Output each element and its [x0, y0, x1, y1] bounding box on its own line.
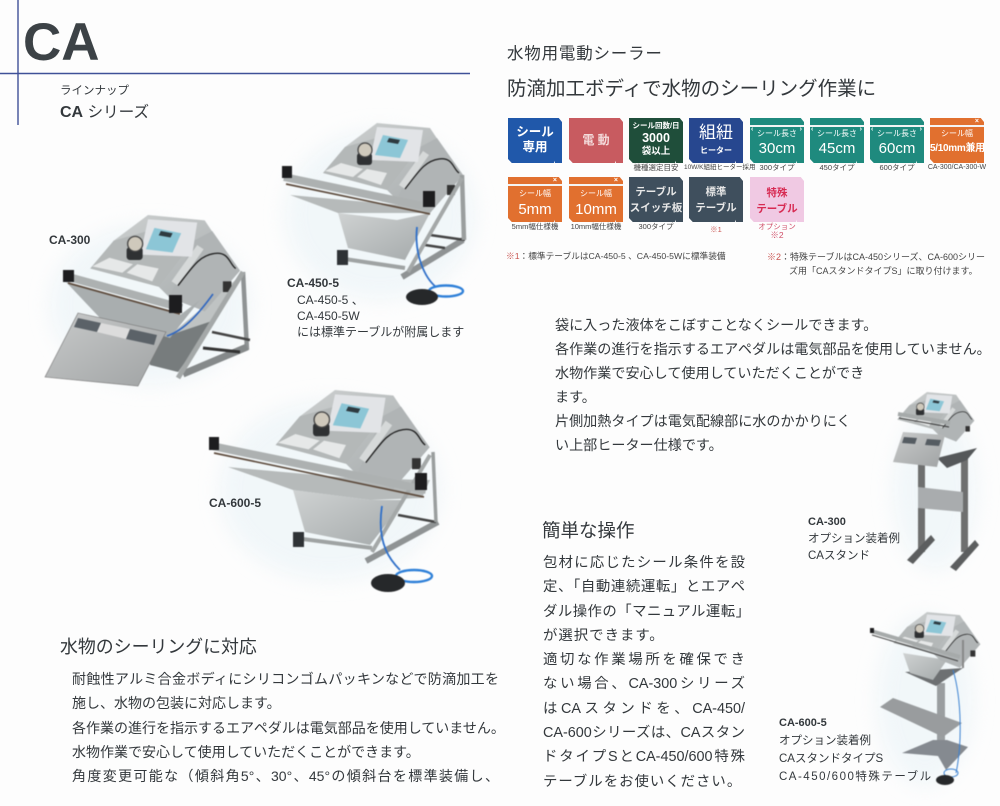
- body text: right upper: [555, 317, 991, 453]
- icon: seal length 30cm: シール長さ: [757, 129, 797, 138]
- captions: first row: 600タイプ: [879, 163, 914, 172]
- captions: first row: 機種選定目安: [634, 163, 678, 172]
- icon: seal length 45cm: シール長さ: [817, 129, 857, 138]
- icon: seal width 10mm: 10mm: [575, 201, 617, 218]
- captions: second row: [512, 222, 796, 240]
- icon: seal length 30cm: 30cm: [759, 140, 795, 157]
- body text: right upper: 水物作業で安心して使用していただくことができ: [555, 365, 864, 381]
- icon: seal length 60cm: シール長さ: [877, 129, 917, 138]
- series name: CA シリーズ: [60, 104, 149, 121]
- icon: braided heater: ヒーター: [700, 146, 732, 155]
- captions: second row: 5mm幅仕様機: [512, 222, 558, 231]
- icon: seal length 30cm: ›: [800, 126, 802, 133]
- body text: right upper: い上部ヒーター仕様です。: [555, 437, 723, 453]
- machine: CA-600-5 on stand: [870, 612, 980, 785]
- note: CA-450-5: CA-450-5W: [297, 309, 360, 323]
- icon: seal length 45cm: 45cm: [819, 140, 855, 157]
- main heading: 防滴加工ボディで水物のシーリング作業に: [507, 78, 876, 100]
- heading: easy operation: 簡単な操作: [542, 520, 635, 541]
- header rule lines: [0, 0, 470, 125]
- icon: seal width 5mm: [508, 177, 562, 222]
- icon: seal length 45cm: [810, 118, 864, 163]
- body text: easy operation: CA-600シリーズは、CAスタン: [543, 725, 745, 741]
- icon: electric: [569, 118, 623, 163]
- machine: CA-600-5: [209, 390, 440, 592]
- icon: seal width 5/10mm: シール幅: [941, 129, 973, 138]
- icon: seal width 10mm: シール幅: [580, 189, 612, 198]
- icon: seal width 5mm: シール幅: [519, 189, 551, 198]
- label: CA-600-5 stand option: オプション装着例: [779, 735, 871, 747]
- captions: first row: 300タイプ: [759, 163, 794, 172]
- icon: seal only: [508, 118, 562, 163]
- label: CA-600-5 stand option: CA-600-5: [779, 717, 827, 729]
- body text: water sealing: 水物作業で安心して使用していただくことができます。: [72, 744, 420, 760]
- icon: seal length 60cm: ‹: [871, 126, 873, 133]
- body text: easy operation: ダル操作の「マニュアル運転」: [543, 604, 750, 620]
- body text: easy operation: テーブルをお使いください。: [543, 774, 742, 790]
- body text: right upper: 各作業の進行を指示するエアペダルは電気部品を使用していません。: [555, 341, 991, 357]
- captions: second row: オプション: [758, 222, 796, 231]
- body text: right upper: 袋に入った液体をこぼすことなくシールできます。: [555, 317, 877, 333]
- icon: special table: [750, 177, 804, 222]
- label: CA-300 stand option: [808, 516, 900, 562]
- machine: CA-450-5: [282, 123, 475, 305]
- icon: table switch plate: スイッチ板: [630, 202, 682, 214]
- label: CA-600-5: CA-600-5: [209, 496, 261, 510]
- body text: water sealing: 耐蝕性アルミ合金ボディにシリコンゴムパッキンなどで防滴加工を: [72, 671, 499, 687]
- icon: seal length 30cm: [750, 118, 804, 163]
- footnote 2: ズ用「CAスタンドタイプS」に取り付けます。: [789, 266, 978, 276]
- machine: CA-300: [45, 215, 250, 386]
- icon: seal length 30cm: ‹: [751, 126, 753, 133]
- captions: first row: 450タイプ: [819, 163, 854, 172]
- icon: seal length 60cm: 60cm: [879, 140, 915, 157]
- icon: special table: 特殊: [766, 187, 788, 199]
- captions: second row: 300タイプ: [638, 222, 674, 231]
- lineup label: ラインナップ: [60, 85, 129, 97]
- icon: seal width 5/10mm: ×: [975, 118, 979, 125]
- icon: seal width 5mm: 5mm: [518, 201, 552, 218]
- icon: 3000 bags: 袋以上: [642, 146, 670, 157]
- icon: braided heater: 組紐: [699, 123, 733, 142]
- footnote 1: ※1：標準テーブルはCA-450-5 、CA-450-5Wに標準装備: [506, 251, 726, 261]
- label: CA-600-5 stand option: CAスタンドタイプS: [779, 753, 883, 765]
- icon: seal width 10mm: [569, 177, 623, 222]
- label: CA-300 stand option: CAスタンド: [808, 550, 870, 562]
- body text: right upper: 片側加熱タイプは電気配線部に水のかかりにく: [555, 413, 851, 429]
- icon: seal only: 専用: [522, 140, 548, 154]
- product type heading: 水物用電動シーラー: [507, 45, 663, 63]
- body text: easy operation: ない場合、CA-300シリーズ: [543, 676, 745, 692]
- captions: first row: [634, 163, 986, 172]
- machine: CA-300 on stand: [893, 392, 979, 571]
- icon: 3000 bags: [629, 118, 683, 163]
- body text: easy operation: ドタイプSとCA-450/600特殊: [543, 749, 745, 765]
- label: CA-600-5 stand option: [779, 717, 933, 783]
- body text: right upper: ます。: [555, 389, 596, 405]
- body text: easy operation: 包材に応じたシール条件を設: [543, 555, 745, 571]
- icon: 3000 bags: 3000: [642, 131, 670, 145]
- body text: easy operation: [543, 554, 750, 790]
- label: CA-450-5: CA-450-5: [287, 276, 339, 290]
- icon: special table: テーブル: [756, 203, 798, 215]
- icon: 3000 bags: シール回数/日: [632, 121, 680, 130]
- captions: first row: CA-300/CA-300-W: [928, 164, 986, 171]
- body text: easy operation: 定、「自動連続運転」とエアペ: [543, 579, 745, 595]
- icon: table switch plate: [629, 177, 683, 222]
- body text: easy operation: が選択できます。: [543, 628, 665, 644]
- heading: water sealing: 水物のシーリングに対応: [60, 637, 257, 657]
- label: CA-300 stand option: オプション装着例: [808, 533, 900, 545]
- footnote 2: [767, 252, 985, 276]
- body text: water sealing: 各作業の進行を指示するエアペダルは電気部品を使用していません。: [72, 720, 505, 736]
- icon: standard table: テーブル: [695, 202, 737, 214]
- note: CA-450-5: には標準テーブルが附属します: [297, 325, 464, 339]
- icon: table switch plate: テーブル: [635, 186, 677, 198]
- icon: seal length 60cm: ›: [920, 126, 922, 133]
- captions: second row: 10mm幅仕様機: [571, 222, 621, 231]
- footnote 2: ※2：特殊テーブルはCA-450シリーズ、CA-600シリー: [767, 252, 985, 262]
- body text: water sealing: [72, 671, 505, 784]
- icon: seal length 45cm: ›: [860, 126, 862, 133]
- icon: seal only: シール: [516, 125, 554, 139]
- icon: standard table: [689, 177, 743, 222]
- captions: second row: ※1: [710, 225, 722, 234]
- icon: seal width 5/10mm: 5/10mm兼用: [930, 143, 984, 154]
- captions: first row: 10W/K組紐ヒーター採用: [684, 164, 756, 171]
- icon: electric: 電 動: [582, 133, 610, 147]
- captions: second row: ※2: [770, 230, 784, 240]
- icon: seal length 45cm: ‹: [811, 126, 813, 133]
- icon: seal width 5mm: ×: [553, 177, 557, 184]
- label: CA-600-5 stand option: CA-450/600特殊テーブル: [779, 771, 933, 783]
- icon: braided heater: [689, 118, 743, 163]
- note: CA-450-5: CA-450-5 、: [297, 293, 364, 307]
- note: CA-450-5: [297, 293, 464, 339]
- icon: seal length 60cm: [870, 118, 924, 163]
- body text: easy operation: はCAスタンドを、CA-450/: [543, 701, 745, 717]
- feature icons: [508, 118, 986, 240]
- icon: standard table: 標準: [706, 186, 726, 198]
- title: CA: CA: [23, 13, 100, 72]
- body text: easy operation: 適切な作業場所を確保でき: [543, 652, 745, 668]
- label: CA-300: CA-300: [49, 233, 90, 247]
- icon: seal width 10mm: ×: [614, 177, 618, 184]
- body text: water sealing: 角度変更可能な（傾斜角5°、30°、45°の傾斜台を標準装備し、: [72, 768, 499, 784]
- icon: seal width 5/10mm: [930, 118, 984, 163]
- label: CA-300 stand option: CA-300: [808, 516, 846, 528]
- body text: water sealing: 施し、水物の包装に対応します。: [72, 695, 281, 711]
